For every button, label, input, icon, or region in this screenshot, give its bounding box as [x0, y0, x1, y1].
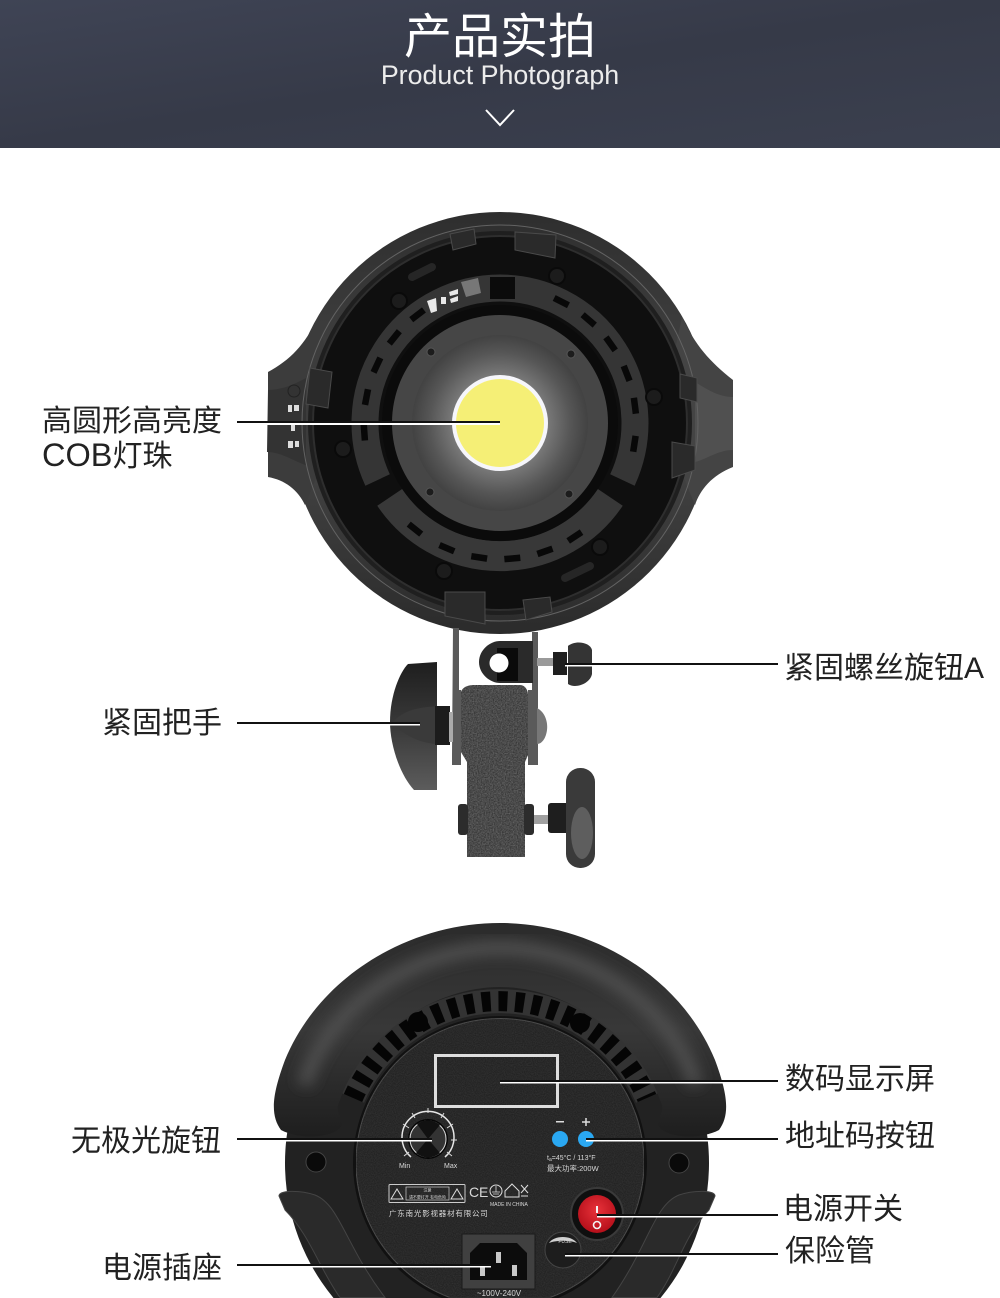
warning label: 请不要打开 有电危险	[409, 1194, 446, 1200]
rating text: =45°C / 113°F	[552, 1154, 596, 1162]
reflector cup	[392, 315, 608, 531]
vent round holes	[408, 1012, 428, 1032]
leader: handle	[237, 723, 420, 724]
ring notch and indicator	[490, 277, 515, 299]
power socket	[462, 1234, 535, 1298]
warning label: 注意	[424, 1186, 432, 1192]
display window	[436, 1056, 558, 1106]
dimmer knob: Max	[444, 1163, 458, 1170]
header banner	[0, 0, 1000, 148]
label: COB: 高圆形高亮度	[42, 405, 222, 438]
label: COB: COB灯珠	[42, 437, 172, 473]
address buttons	[552, 1118, 594, 1147]
power socket: ~100V-240V	[477, 1289, 522, 1298]
left ear	[268, 317, 340, 505]
title: 产品实拍	[404, 11, 596, 64]
leader: knob A	[565, 664, 778, 665]
right ear	[660, 317, 733, 505]
warning label	[389, 1184, 465, 1202]
made in china: MADE IN CHINA	[490, 1202, 528, 1208]
leader: display	[500, 1081, 778, 1082]
upper retaining tabs	[306, 229, 697, 624]
black gap around reflector	[382, 305, 618, 541]
label: address button: 地址码按钮	[785, 1120, 935, 1153]
power switch	[571, 1188, 623, 1240]
inner dark cavity	[308, 231, 692, 615]
subtitle: Product Photograph	[381, 60, 619, 90]
bracket plates	[452, 628, 461, 765]
mounting ring lower	[390, 497, 610, 556]
label: dimmer: 无极光旋钮	[71, 1125, 221, 1158]
label: COB	[42, 405, 222, 473]
rating text: a	[549, 1157, 552, 1163]
umbrella clamp	[479, 641, 533, 683]
fuse holder: FUSE	[558, 1239, 572, 1245]
swivel block	[461, 685, 528, 857]
lower knob nubs	[458, 804, 468, 835]
label: handle: 紧固把手	[102, 707, 222, 740]
body holes	[306, 1152, 326, 1172]
right metal dome	[537, 708, 547, 744]
arched handle	[274, 923, 726, 1137]
leader: dimmer	[237, 1139, 432, 1140]
leader: socket	[237, 1265, 491, 1266]
label: display: 数码显示屏	[785, 1063, 935, 1096]
label: switch: 电源开关	[783, 1193, 903, 1226]
COB LED	[452, 375, 548, 471]
panel: front of lamp head	[267, 212, 733, 634]
ring dash slots	[364, 298, 636, 559]
rim highlight	[302, 225, 698, 621]
fuse holder	[545, 1232, 581, 1268]
leader: address button	[586, 1139, 778, 1140]
reflector screws	[426, 348, 575, 498]
upper tightening knob A	[537, 643, 592, 686]
certification marks: C	[469, 1184, 479, 1200]
label: fuse: 保险管	[785, 1235, 875, 1268]
leader: fuse	[565, 1254, 778, 1255]
dimmer knob	[399, 1108, 458, 1170]
certification marks: E	[479, 1184, 488, 1200]
dimmer knob: Min	[399, 1163, 410, 1170]
label: knob A: 紧固螺丝旋钮A	[784, 652, 984, 685]
power text: 最大功率:200W	[547, 1163, 600, 1173]
leader: switch	[597, 1215, 778, 1216]
ring screws	[335, 268, 662, 579]
lower wings	[279, 1191, 385, 1298]
certification marks	[469, 1184, 528, 1200]
ear plates	[267, 378, 306, 465]
left tightening handle	[390, 662, 453, 790]
leader: COB	[237, 422, 500, 424]
icon: chevron down	[486, 110, 514, 125]
company name: 广东南光影视器材有限公司	[389, 1208, 489, 1218]
lamp head outer shell	[289, 212, 711, 634]
lower tightening knob	[534, 768, 595, 868]
handle highlight	[304, 948, 696, 1085]
panel: bracket and knobs	[390, 628, 595, 868]
rating text: t	[547, 1155, 549, 1162]
vent ring	[353, 1001, 647, 1098]
rear control plate	[353, 1016, 647, 1298]
slide slots	[412, 267, 590, 578]
panel: back of lamp	[274, 923, 726, 1298]
body	[285, 951, 709, 1298]
mounting ring upper	[365, 288, 635, 480]
label: socket: 电源插座	[102, 1252, 222, 1285]
side button and ear markings	[288, 385, 300, 397]
